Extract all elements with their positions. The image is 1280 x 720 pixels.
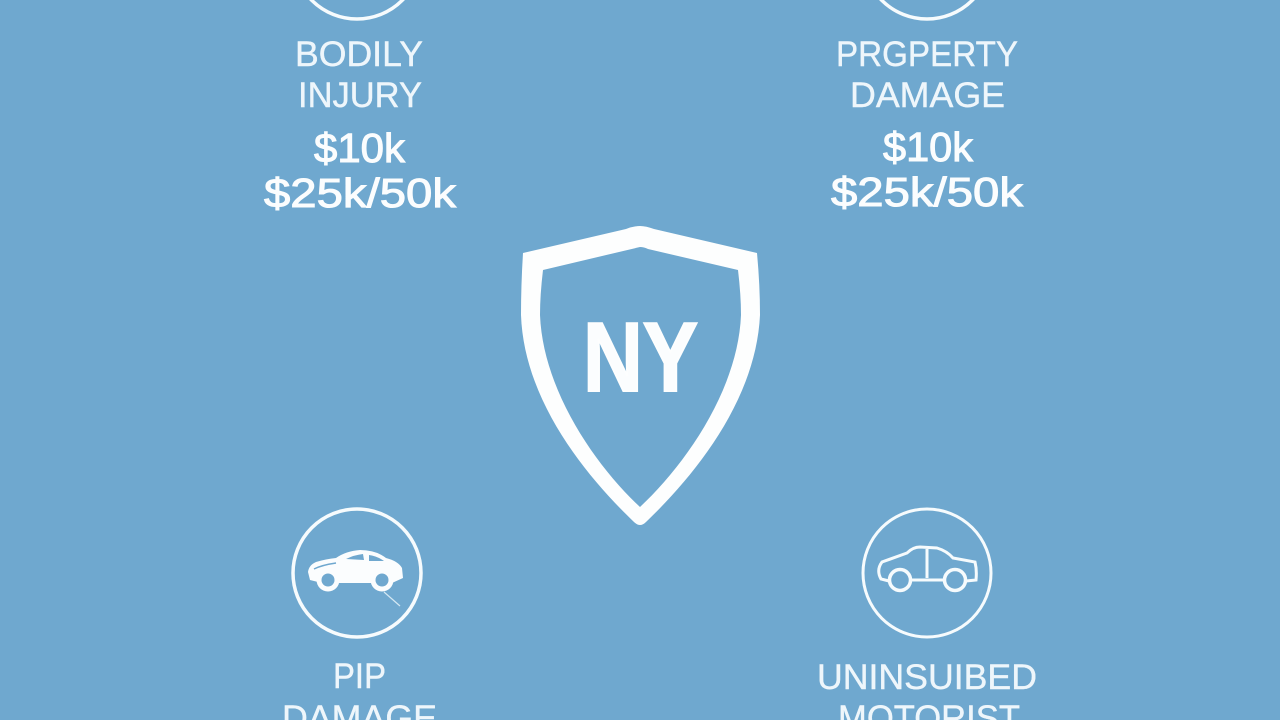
heading: uninsured motorist: UNINSUIBED	[817, 658, 1037, 697]
heading: uninsured motorist	[817, 658, 1037, 720]
panel: uninsured motorist	[817, 509, 1037, 720]
icon: filled car in circle	[293, 509, 421, 637]
heading: property damage	[836, 35, 1018, 115]
heading: bodily injury	[295, 35, 423, 115]
heading: property damage: DAMAGE	[850, 76, 1005, 115]
heading: PIP damage	[282, 657, 437, 720]
values: bodily injury limits: $25k/50k	[264, 170, 457, 216]
heading: property damage: PRGPERTY	[836, 35, 1018, 74]
icon: outlined car in circle	[863, 509, 991, 637]
icon: property damage circle	[863, 0, 991, 19]
heading: PIP damage: PIP	[333, 657, 386, 696]
heading: bodily injury: INJURY	[298, 76, 422, 115]
panel: bodily injury	[264, 0, 457, 216]
shield label: NY	[583, 302, 698, 412]
values: bodily injury limits: $10k	[314, 125, 405, 171]
icon: central NY shield	[521, 226, 760, 525]
values: property damage limits: $10k	[883, 124, 973, 170]
panel: PIP	[282, 509, 437, 720]
shield outline	[521, 226, 760, 525]
values: property damage limits	[831, 124, 1024, 215]
heading: bodily injury: BODILY	[295, 35, 423, 74]
panel: property damage	[831, 0, 1024, 215]
values: bodily injury limits	[264, 125, 457, 216]
icon: bodily injury circle	[293, 0, 421, 19]
values: property damage limits: $25k/50k	[831, 169, 1024, 215]
